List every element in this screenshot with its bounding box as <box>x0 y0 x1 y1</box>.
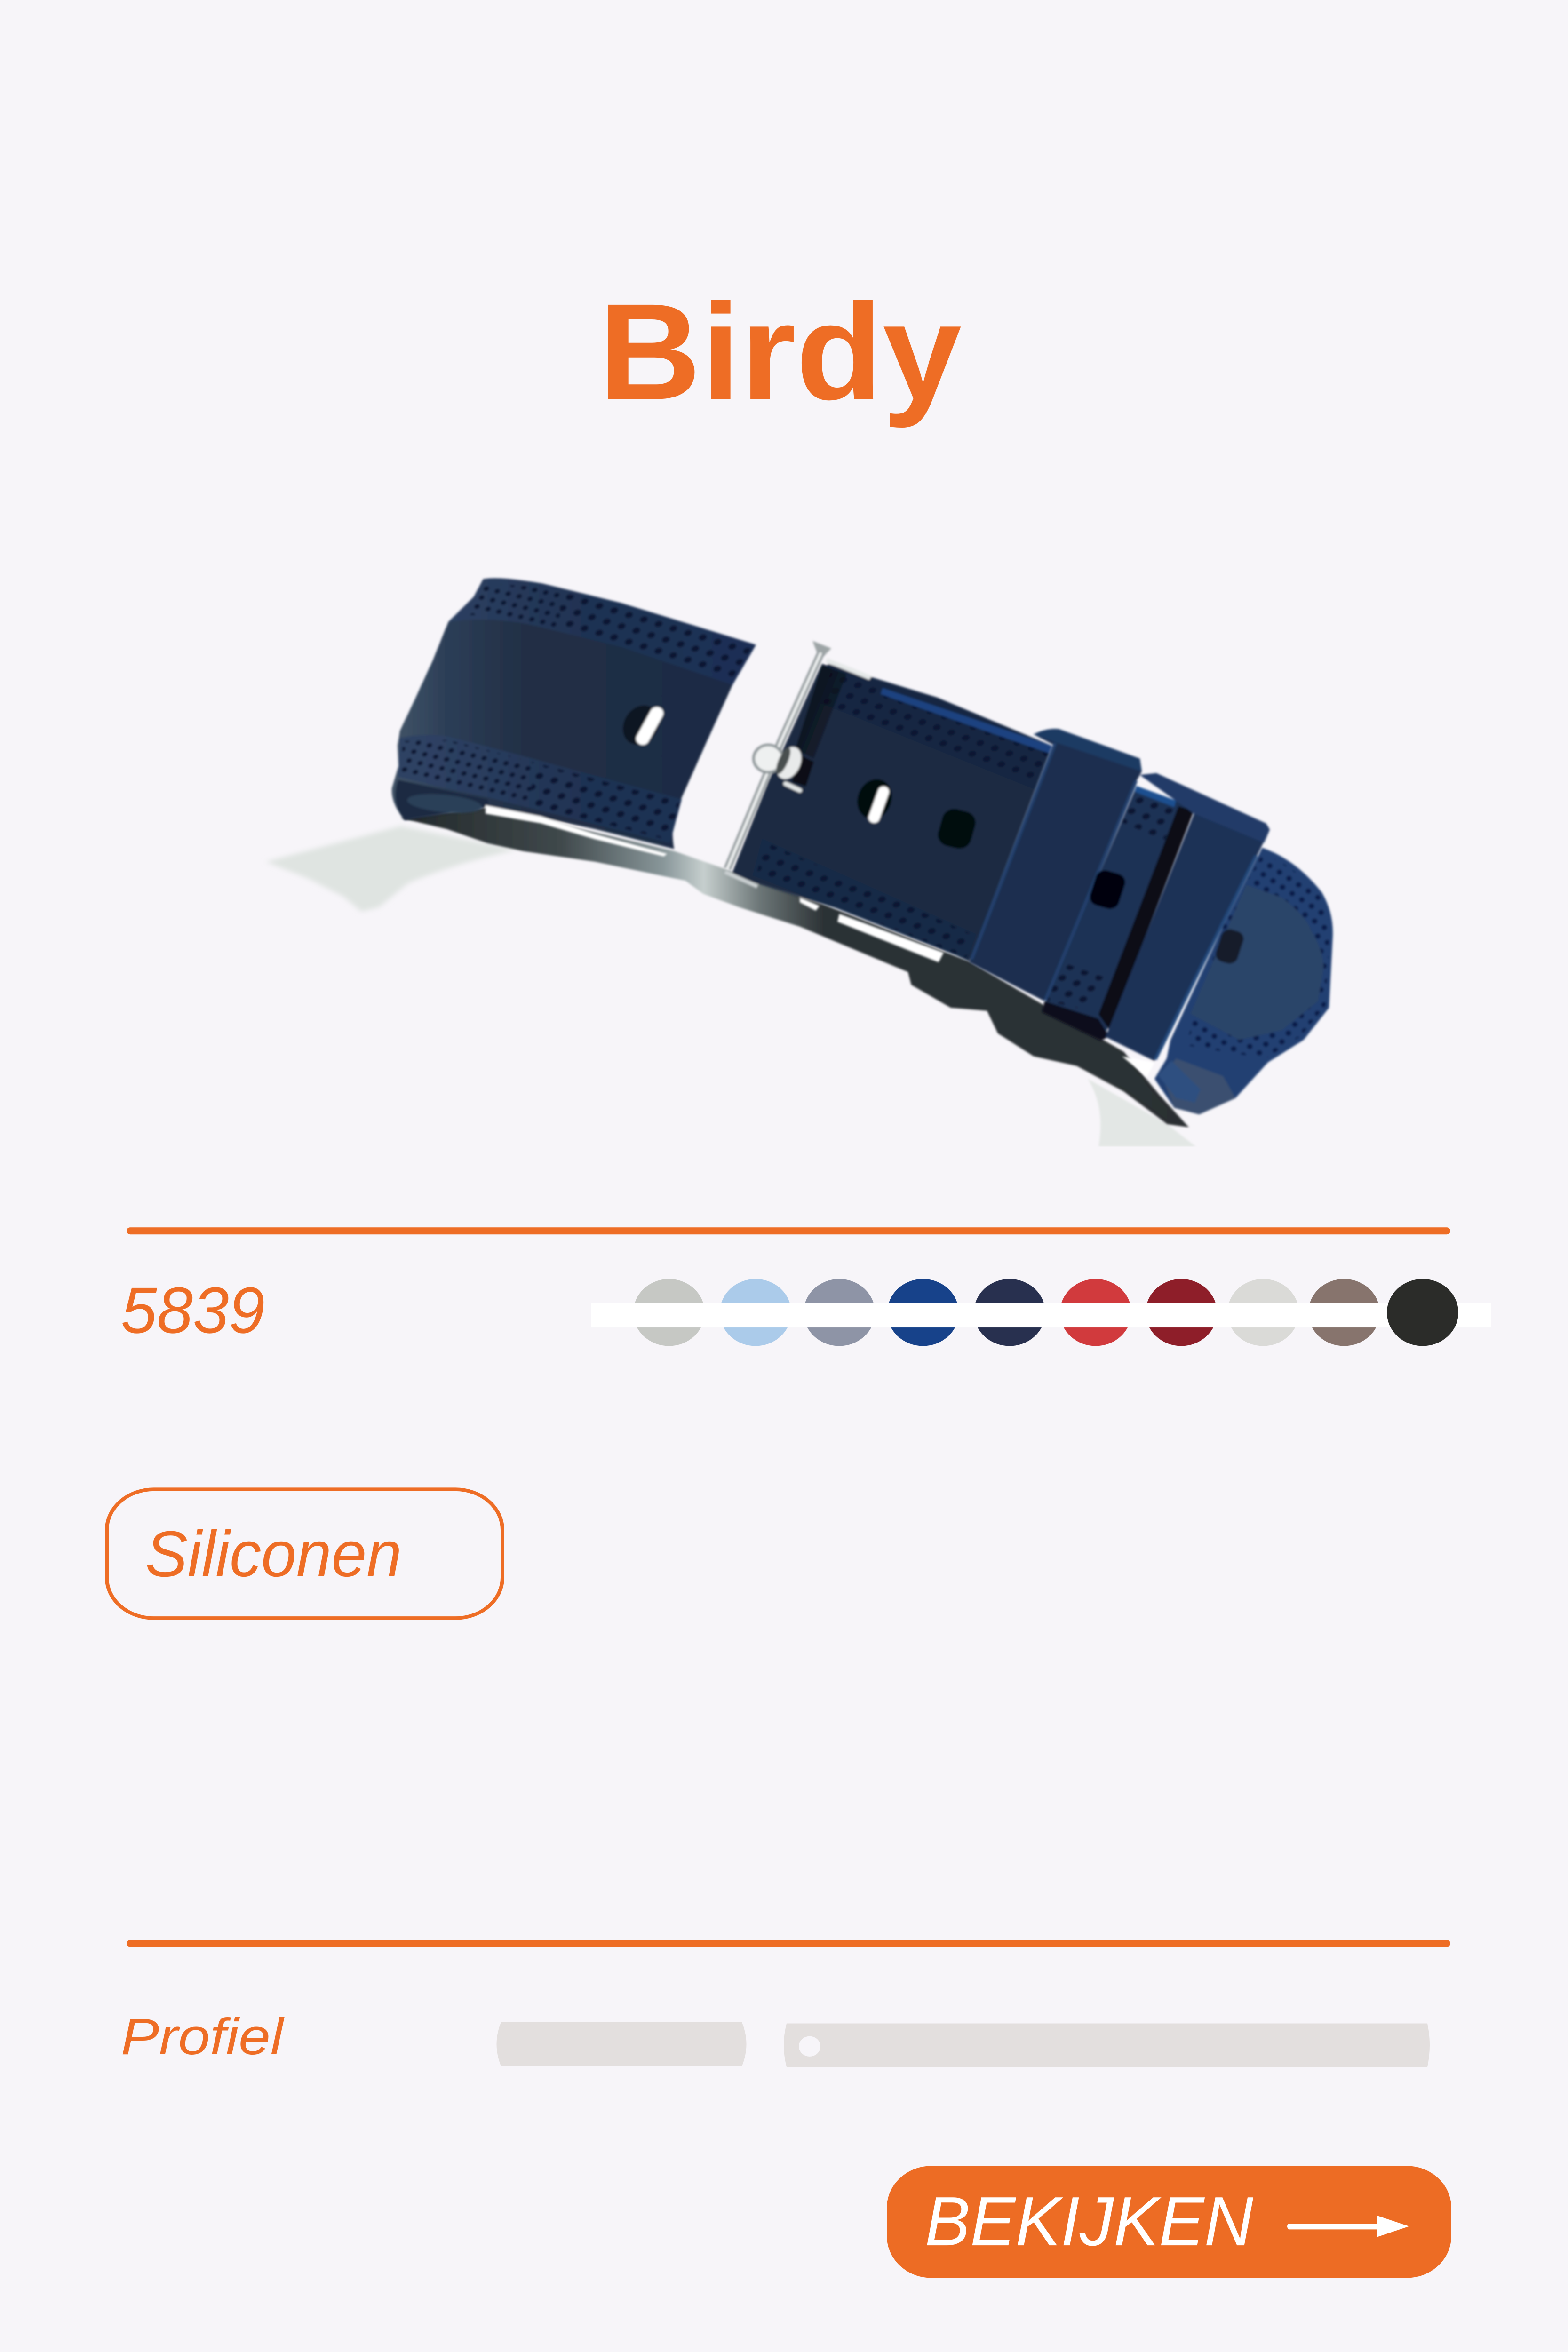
strap keeper loop 1 <box>969 729 1142 1001</box>
divider <box>127 1227 1450 1234</box>
divider <box>127 1940 1450 1947</box>
material tag: Siliconen <box>145 1518 402 1590</box>
material tag <box>107 1489 502 1618</box>
button <box>887 2166 1451 2278</box>
watch case <box>401 807 1189 1127</box>
white highlights along the case <box>486 805 1154 1077</box>
steel buckle <box>725 641 870 886</box>
strap holes <box>616 700 1246 966</box>
button: BEKIJKEN <box>925 2183 1253 2260</box>
strap: tail end <box>1154 848 1333 1114</box>
watch lug, bottom right <box>1088 1079 1196 1147</box>
watch lug, upper left <box>266 826 516 912</box>
arrow icon <box>1287 2216 1409 2237</box>
profile bar: short segment <box>497 2022 746 2066</box>
strap: centre section under buckle <box>732 664 1052 961</box>
title: Birdy <box>598 275 963 429</box>
product image: blue silicone watch strap <box>266 578 1333 1147</box>
colour swatches <box>591 1279 1491 1346</box>
strap keeper loop 2 <box>1106 773 1270 1061</box>
strap: left section with perforated bands <box>392 578 756 849</box>
profile bar: long segment with hole <box>784 2024 1430 2067</box>
strap: section between keepers <box>1042 786 1194 1041</box>
article number: 5839 <box>121 1274 265 1347</box>
profile label: Profiel <box>121 2008 285 2065</box>
